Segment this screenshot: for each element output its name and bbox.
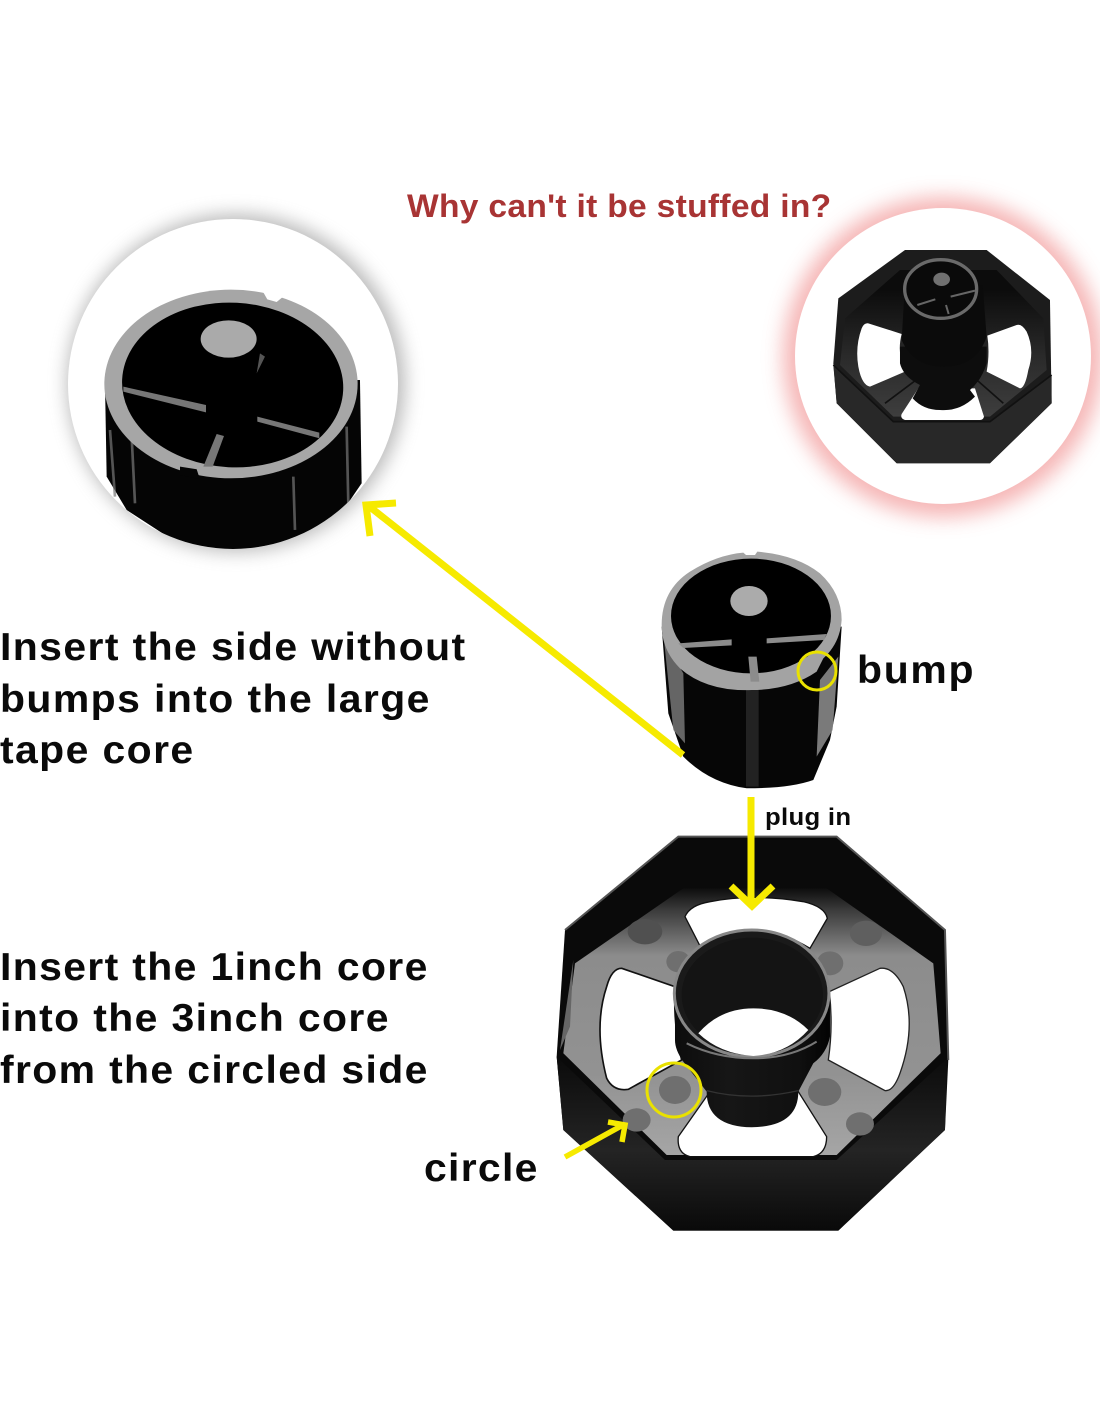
right body stripe [817, 657, 838, 757]
hub interior [682, 938, 823, 1052]
spoke right [257, 417, 319, 438]
upper rim highlight [565, 837, 948, 1060]
label: circle: circle [424, 1147, 537, 1190]
hub through hole [698, 1008, 808, 1056]
label: plug in: plug in [765, 804, 851, 831]
panel: left magnified core side view [67, 214, 405, 553]
arrow: long yellow arrow to magnified view [366, 503, 683, 755]
right spoke [767, 634, 827, 643]
hub seam [707, 1091, 798, 1096]
pin top [730, 586, 768, 616]
text block: insert side without bumps: bumps into the large [0, 678, 429, 721]
rim bottom notch [180, 466, 199, 476]
callout ring: circled side [647, 1063, 701, 1117]
right window [828, 968, 909, 1091]
bottom window [678, 1092, 827, 1157]
pink glow [783, 197, 1100, 517]
core body [105, 380, 362, 553]
left spoke [678, 639, 732, 648]
hub outer rim [674, 930, 829, 1057]
assembled adapter photo [833, 250, 1052, 463]
inner floor [840, 270, 1047, 417]
core opening [118, 297, 347, 473]
text block: insert 1 inch into 3 inch [0, 946, 427, 1092]
hub lower rim [687, 1042, 817, 1058]
inner floor [563, 888, 941, 1155]
lower hub [675, 993, 830, 1127]
part: 1 inch core with bump [662, 552, 842, 788]
spoke bottom [203, 434, 224, 467]
part: 3 inch octagon core [557, 837, 948, 1231]
rim top notch [264, 292, 282, 302]
bottom spoke [748, 657, 759, 682]
dimples [623, 919, 882, 1136]
front rim edge [833, 365, 1052, 422]
center rib [746, 690, 759, 787]
core body [662, 627, 842, 788]
text block: insert side without bumps: tape core [0, 729, 193, 772]
text block: insert 1 inch into 3 inch: Insert the 1inch core [0, 946, 427, 989]
white disc [795, 208, 1091, 504]
label: bump: bump [857, 649, 974, 692]
text block: insert side without bumps [0, 626, 465, 772]
magnified core photo [104, 289, 362, 553]
spoke left [123, 387, 206, 412]
core rim [104, 290, 358, 478]
text block: insert 1 inch into 3 inch: from the circled side [0, 1049, 427, 1092]
left inner wall highlight [560, 960, 573, 1050]
front wall [557, 1057, 947, 1231]
arrow: plug in [731, 797, 773, 906]
inserted core body [902, 285, 987, 367]
front wall [833, 365, 1052, 463]
lower hub [900, 347, 987, 410]
top window [685, 897, 827, 948]
arrow: circle label arrow [565, 1122, 625, 1157]
disc shadow [67, 214, 405, 552]
body reflections [110, 427, 348, 530]
left window [600, 968, 682, 1090]
right window [987, 325, 1031, 388]
octagon body [833, 250, 1052, 463]
octagon outer silhouette [557, 837, 948, 1231]
core rim [662, 552, 842, 690]
core pin [933, 273, 950, 286]
pin top [201, 320, 257, 358]
panel: pink circle showing the incorrect assembly [783, 197, 1100, 517]
pin side glint [257, 353, 265, 373]
bottom window [901, 388, 984, 420]
callout ring: bump [798, 652, 836, 690]
core spokes [917, 291, 975, 314]
white disc [68, 219, 398, 549]
inserted core rim [905, 260, 977, 318]
left body stripe [664, 640, 685, 743]
heading: why can't it be stuffed in: Why can't it be stuffed in? [407, 188, 831, 224]
core opening [671, 559, 831, 673]
text block: insert side without bumps: Insert the side without [0, 626, 465, 669]
spoke grooves [885, 378, 1003, 403]
text block: insert 1 inch into 3 inch: into the 3inch core [0, 997, 388, 1040]
left window [857, 323, 905, 387]
